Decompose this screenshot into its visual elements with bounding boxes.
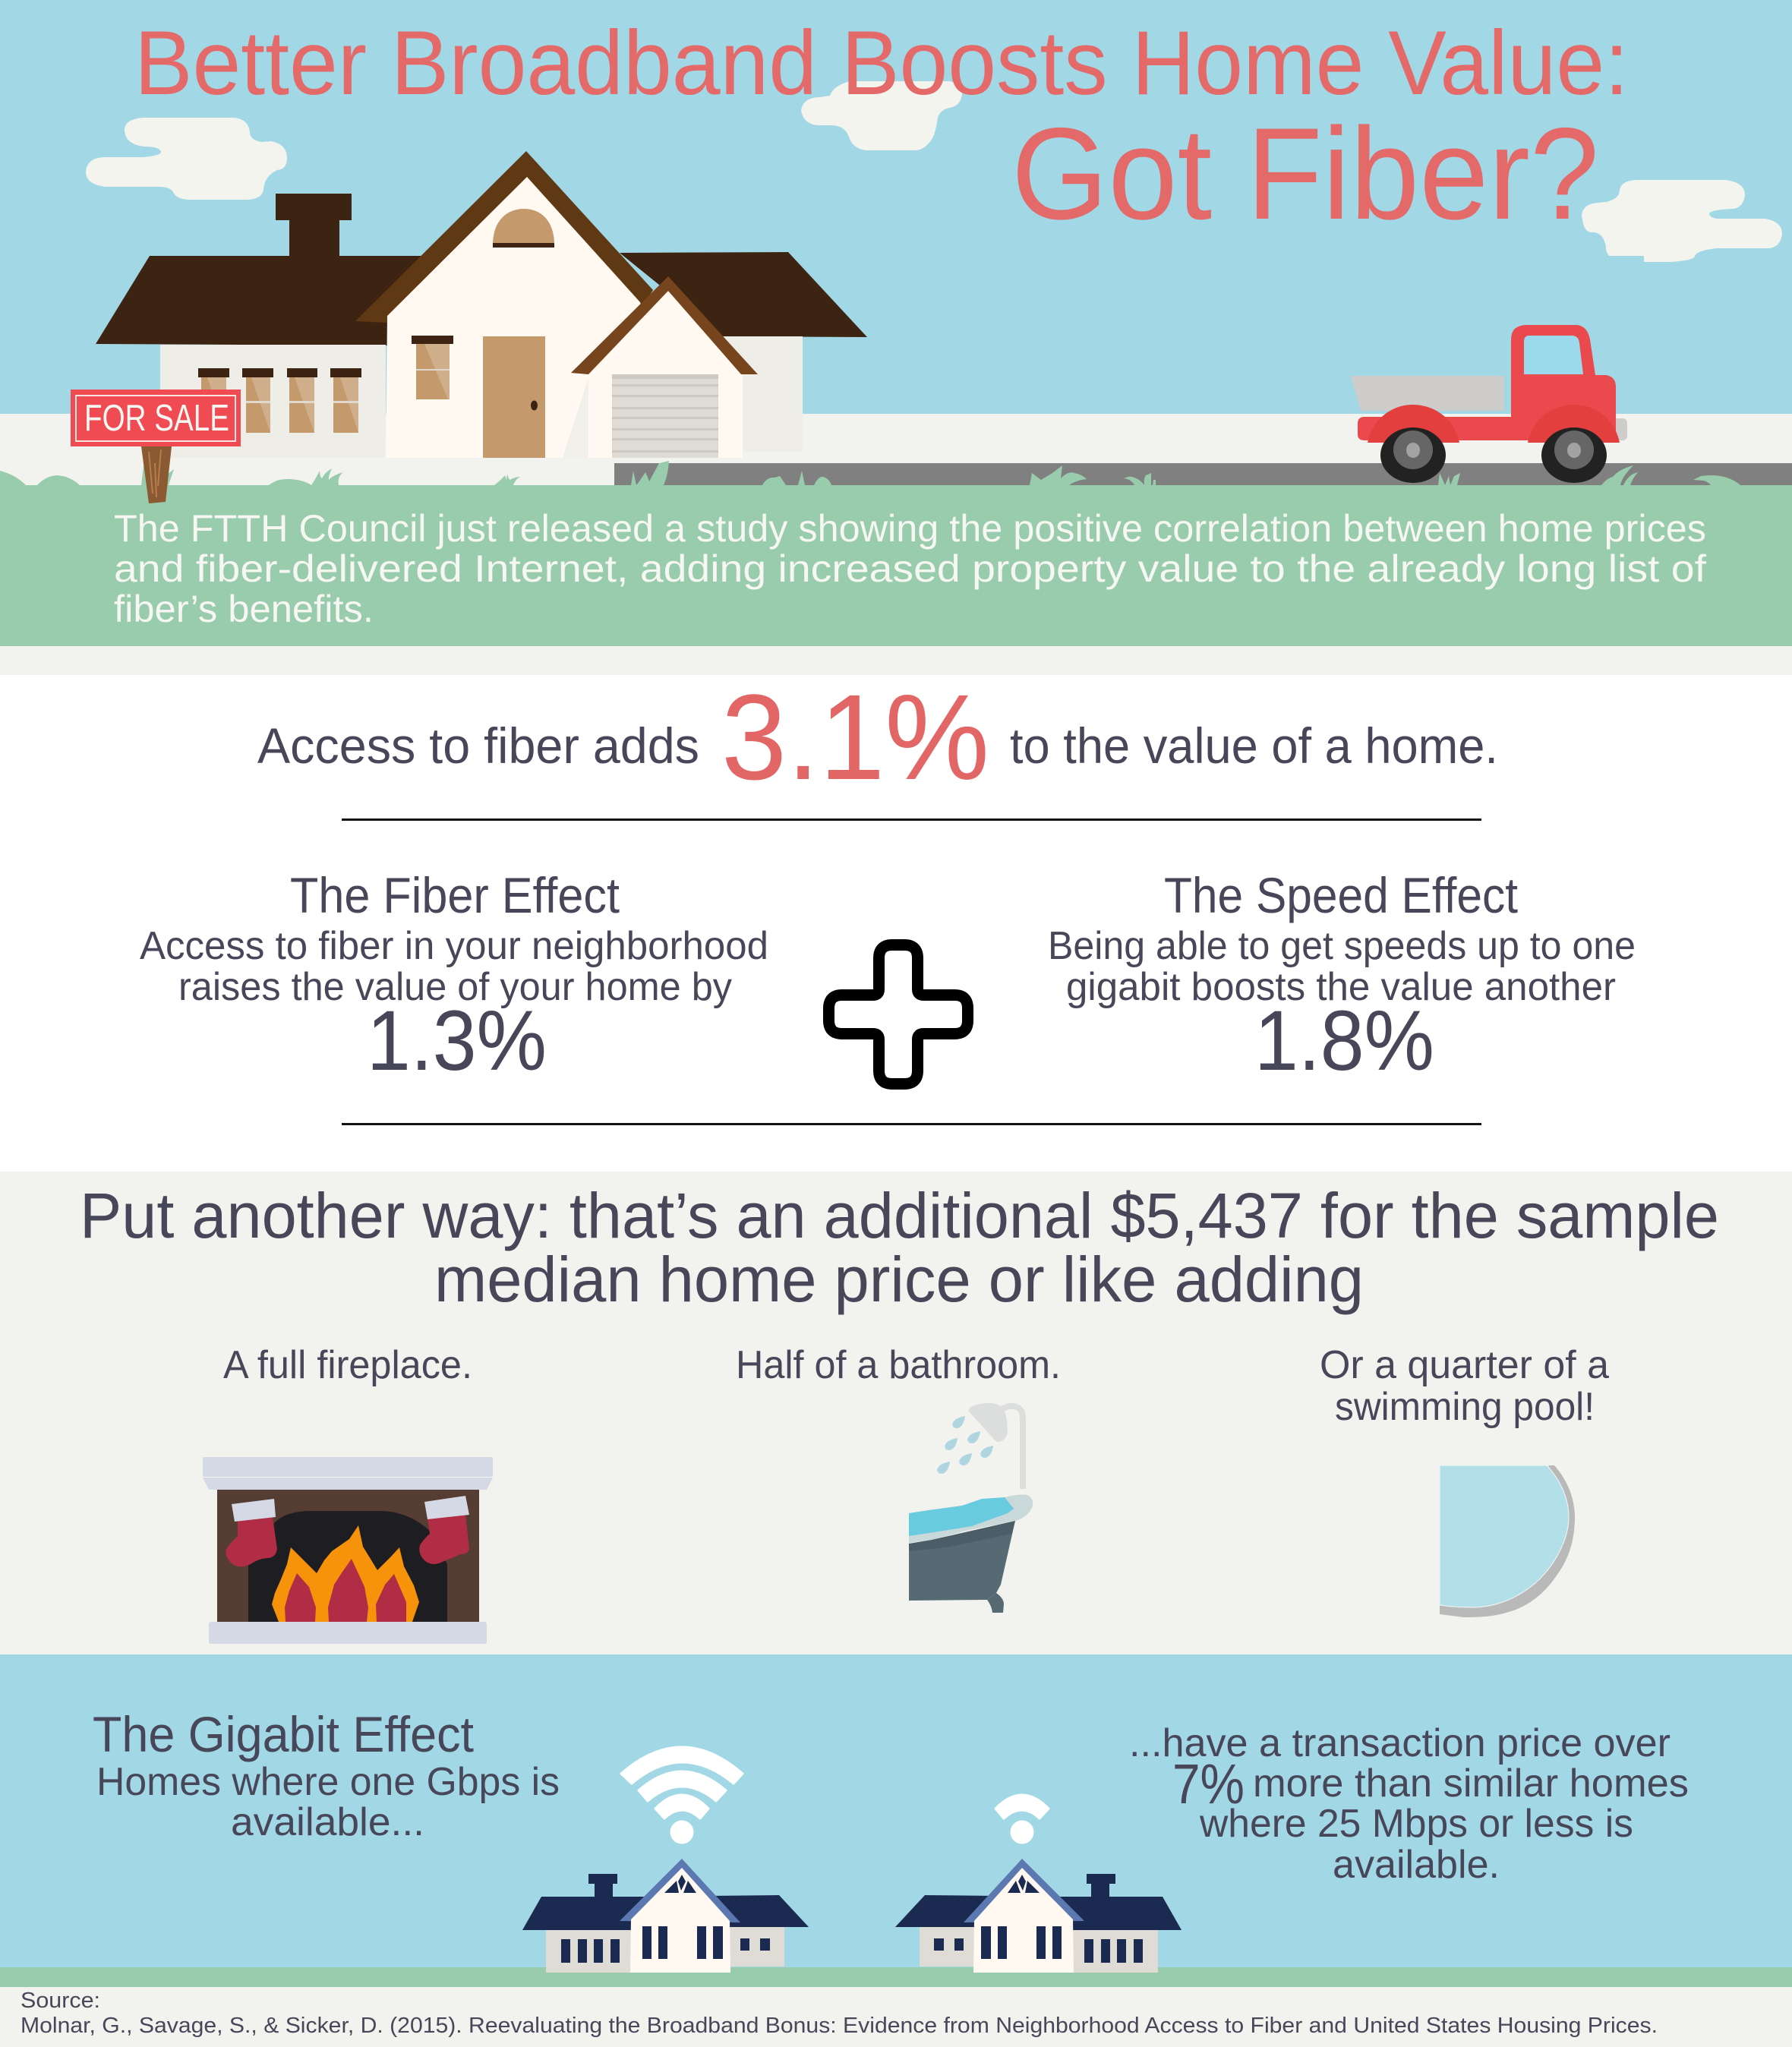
headline stat: Access to fiber adds	[257, 718, 699, 774]
title: Got Fiber?	[1011, 101, 1599, 247]
for sale sign	[71, 390, 241, 503]
the fiber effect: The Fiber Effect	[290, 867, 620, 923]
stocking: left	[226, 1499, 277, 1567]
left wing wall	[160, 345, 386, 458]
icon: slower house with weak wifi	[895, 1795, 1182, 1973]
label: fireplace: A full fireplace.	[223, 1343, 472, 1387]
right wing wall	[723, 336, 803, 452]
garage gable body	[588, 291, 743, 458]
wifi signal	[621, 1747, 743, 1843]
tub rim	[909, 1494, 1033, 1543]
main house body	[386, 177, 743, 458]
wheels	[1380, 427, 1607, 483]
panel: gigabit effect	[0, 1654, 1792, 1987]
sign board	[71, 390, 241, 446]
illustration: truck	[1351, 325, 1627, 483]
gigabit text: right: available.	[1333, 1843, 1500, 1887]
rear bumper	[1602, 418, 1627, 440]
source citation	[21, 1989, 1658, 2038]
gigabit text: left: The Gigabit Effect	[93, 1706, 474, 1762]
right roof	[620, 252, 867, 337]
mantel	[203, 1457, 493, 1490]
tub foot	[987, 1593, 1004, 1613]
the speed effect	[1048, 867, 1636, 1088]
front door	[483, 336, 545, 458]
icon: quarter pool	[1440, 1465, 1575, 1617]
heading	[80, 1180, 1719, 1315]
chimney	[276, 194, 352, 258]
headline stat: to the value of a home.	[1010, 718, 1498, 774]
sign board: FOR SALE	[84, 398, 229, 439]
fenders	[1368, 405, 1620, 443]
panel: put another way	[0, 1172, 1792, 1654]
cloud: left	[86, 118, 287, 200]
garage door	[612, 374, 718, 458]
panel: intro	[0, 485, 1792, 646]
hearth	[209, 1622, 487, 1644]
sign-side grass	[141, 459, 174, 485]
cloud: center	[801, 81, 962, 150]
the speed effect: 1.8%	[1254, 993, 1434, 1088]
truck cab and chassis	[1358, 325, 1616, 440]
intro text: and fiber-delivered Internet, adding increased property value to the already long list of	[114, 547, 1706, 590]
truck bed	[1351, 376, 1504, 411]
grass tufts	[0, 461, 1740, 485]
headline stat: 3.1%	[721, 669, 989, 805]
tub water	[909, 1497, 1014, 1536]
garage gable trim	[571, 276, 758, 374]
gigabit text: right: 7%	[1172, 1752, 1245, 1815]
the fiber effect: raises the value of your home by	[178, 965, 732, 1009]
icon: fireplace	[203, 1457, 493, 1644]
label: pool: swimming pool!	[1335, 1385, 1595, 1429]
gigabit text: right: more than similar homes	[1253, 1762, 1689, 1806]
the fiber effect: 1.3%	[367, 993, 547, 1088]
panel: hero scene	[0, 0, 1792, 485]
icon: gigabit house with strong wifi	[522, 1747, 809, 1973]
shower head	[968, 1403, 1008, 1442]
weak wifi signal	[995, 1795, 1049, 1843]
intro text: fiber’s benefits.	[114, 588, 374, 630]
icon: bathtub and shower	[909, 1403, 1033, 1613]
heading: Put another way: that’s an additional $5,437 for the sample	[80, 1180, 1719, 1251]
intro text: The FTTH Council just released a study showing the positive correlation between home prices	[114, 507, 1706, 550]
icon: plus	[829, 945, 967, 1084]
gigabit text: right	[1129, 1721, 1689, 1887]
source citation: Source:	[21, 1989, 100, 2013]
attic window	[493, 209, 554, 248]
source citation: Molnar, G., Savage, S., & Sicker, D. (2015). Reevaluating the Broadband Bonus: Evidence from Neighborhood Access to Fiber and United States Housing Prices.	[21, 2014, 1658, 2038]
the speed effect: gigabit boosts the value another	[1066, 965, 1616, 1009]
panel: fiber value	[0, 669, 1792, 1172]
the fiber effect: Access to fiber in your neighborhood	[140, 924, 768, 968]
gigabit text: right: where 25 Mbps or less is	[1199, 1802, 1633, 1846]
label: pool: Or a quarter of a	[1320, 1343, 1609, 1387]
cab window	[1524, 336, 1583, 374]
sign post	[141, 446, 172, 503]
house	[522, 1859, 809, 1973]
front window	[412, 336, 453, 399]
the fiber effect	[140, 867, 768, 1088]
label: pool	[1320, 1343, 1609, 1429]
gigabit text: left	[93, 1706, 560, 1844]
title: Better Broadband Boosts Home Value:	[134, 12, 1629, 114]
intro text	[114, 507, 1706, 630]
tub body	[909, 1521, 1015, 1601]
the speed effect: The Speed Effect	[1164, 867, 1518, 923]
illustration: house for sale	[96, 151, 867, 458]
title	[134, 12, 1629, 247]
cloud: right	[1582, 180, 1782, 262]
gigabit text: left: Homes where one Gbps is	[96, 1760, 560, 1804]
main gable trim	[355, 151, 653, 323]
stocking: right	[419, 1496, 469, 1564]
left roof	[96, 256, 425, 345]
gigabit text: left: available...	[231, 1800, 424, 1844]
flames	[272, 1525, 419, 1622]
headline stat	[257, 669, 1498, 805]
heading: median home price or like adding	[434, 1244, 1364, 1315]
gigabit text: right: ...have a transaction price over	[1129, 1721, 1671, 1765]
the speed effect: Being able to get speeds up to one	[1048, 924, 1636, 968]
house mirrored	[895, 1859, 1182, 1973]
firebox	[248, 1511, 447, 1622]
wing windows	[198, 368, 361, 433]
water drops	[937, 1416, 993, 1474]
shower pipe	[1001, 1406, 1023, 1489]
label: bathroom: Half of a bathroom.	[736, 1343, 1061, 1387]
